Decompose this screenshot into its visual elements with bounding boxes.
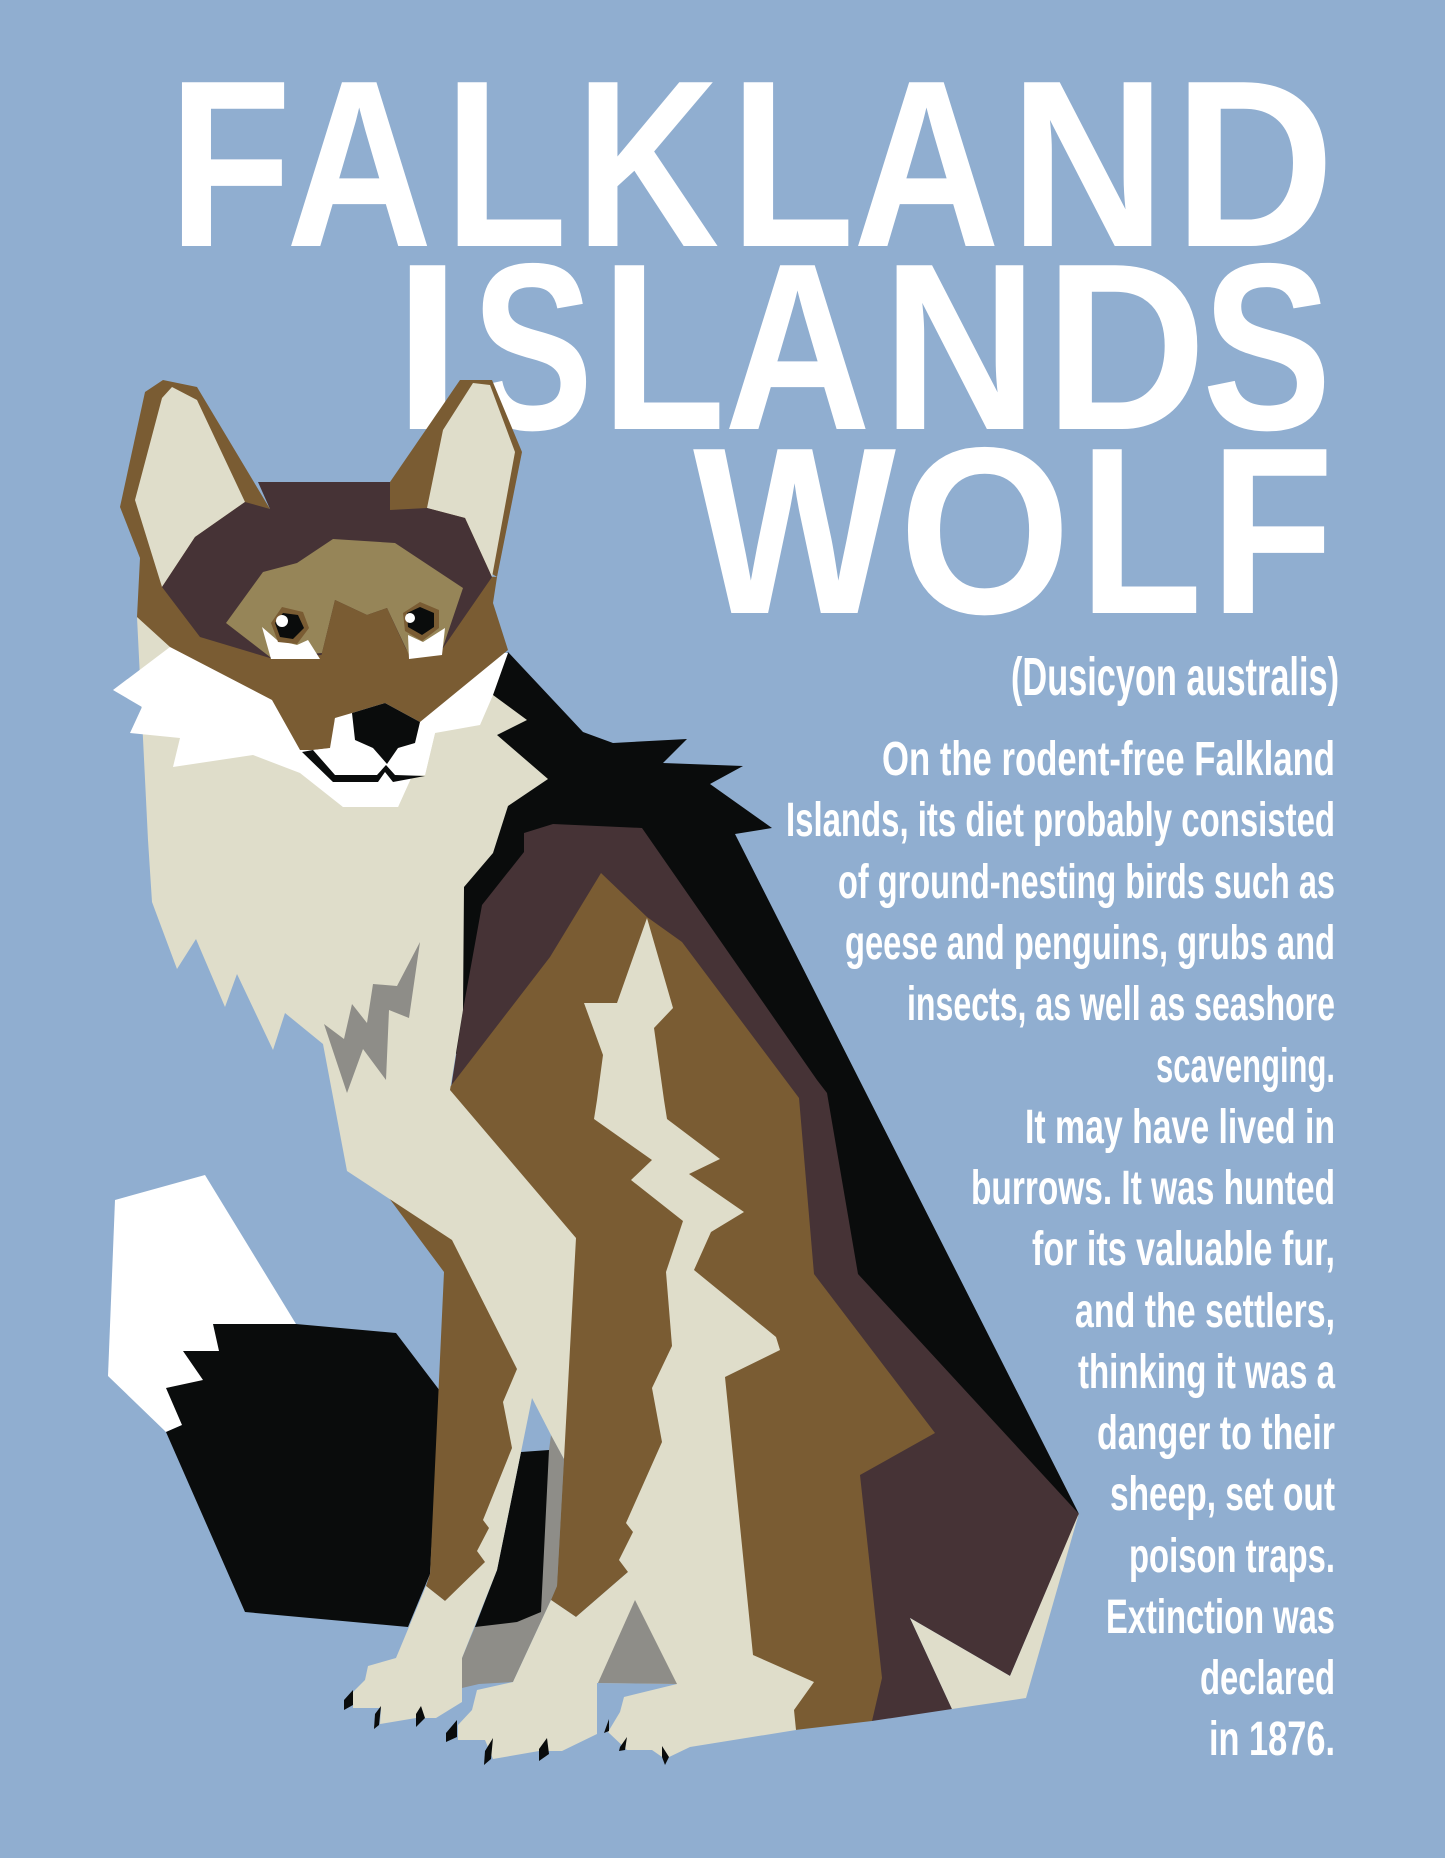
shadow behind legs <box>462 1435 564 1688</box>
brown body <box>440 873 935 1730</box>
white ruff <box>113 647 508 807</box>
title: L <box>444 32 567 297</box>
body text: Extinction was <box>1106 1591 1335 1644</box>
cream haunch fur <box>910 1513 1079 1709</box>
grey triangle between legs <box>598 1600 677 1684</box>
title: A <box>853 32 1000 297</box>
right eye <box>403 602 445 659</box>
title <box>168 32 1335 664</box>
face <box>137 558 508 750</box>
right ear <box>390 380 522 577</box>
title: N <box>882 215 1038 480</box>
title: S <box>472 215 593 480</box>
body text <box>786 733 1335 1766</box>
title: I <box>393 215 462 480</box>
title: D <box>1174 32 1335 297</box>
black back fur <box>450 652 1079 1514</box>
title: S <box>1202 215 1332 480</box>
mouth <box>302 750 425 782</box>
body text: in 1876. <box>1209 1713 1335 1766</box>
body text: scavenging. <box>1156 1040 1335 1093</box>
dark crown <box>162 482 492 658</box>
title: L <box>1079 399 1202 664</box>
title: A <box>724 215 871 480</box>
grey neck mark <box>324 942 420 1093</box>
title: D <box>1044 215 1207 480</box>
title: A <box>286 32 432 297</box>
body text: and the settlers, <box>1075 1285 1335 1338</box>
body text: declared <box>1200 1652 1335 1705</box>
tail <box>108 1175 440 1627</box>
title: F <box>1210 399 1334 664</box>
cream flank stripe and hind legs <box>458 918 814 1759</box>
nose <box>352 703 420 764</box>
title: W <box>693 399 896 664</box>
cream chest and front leg <box>137 617 576 1724</box>
body text: poison traps. <box>1129 1530 1335 1583</box>
body text: danger to their <box>1097 1407 1335 1460</box>
title: L <box>601 215 726 480</box>
body text: sheep, set out <box>1110 1468 1335 1521</box>
nose bridge <box>318 600 412 670</box>
muzzle <box>303 718 435 807</box>
body text: thinking it was a <box>1078 1346 1335 1399</box>
title: F <box>168 32 292 297</box>
title: L <box>730 32 855 297</box>
title: K <box>575 32 719 297</box>
title: N <box>1010 32 1166 297</box>
tan brow <box>226 539 463 657</box>
claws <box>344 1690 669 1765</box>
left ear <box>120 380 270 600</box>
head <box>120 380 522 807</box>
dark back <box>440 824 1079 1721</box>
brown rear of front leg <box>389 1198 525 1601</box>
wolf illustration <box>108 380 1079 1765</box>
left eye <box>262 607 320 659</box>
title: O <box>899 399 1071 664</box>
